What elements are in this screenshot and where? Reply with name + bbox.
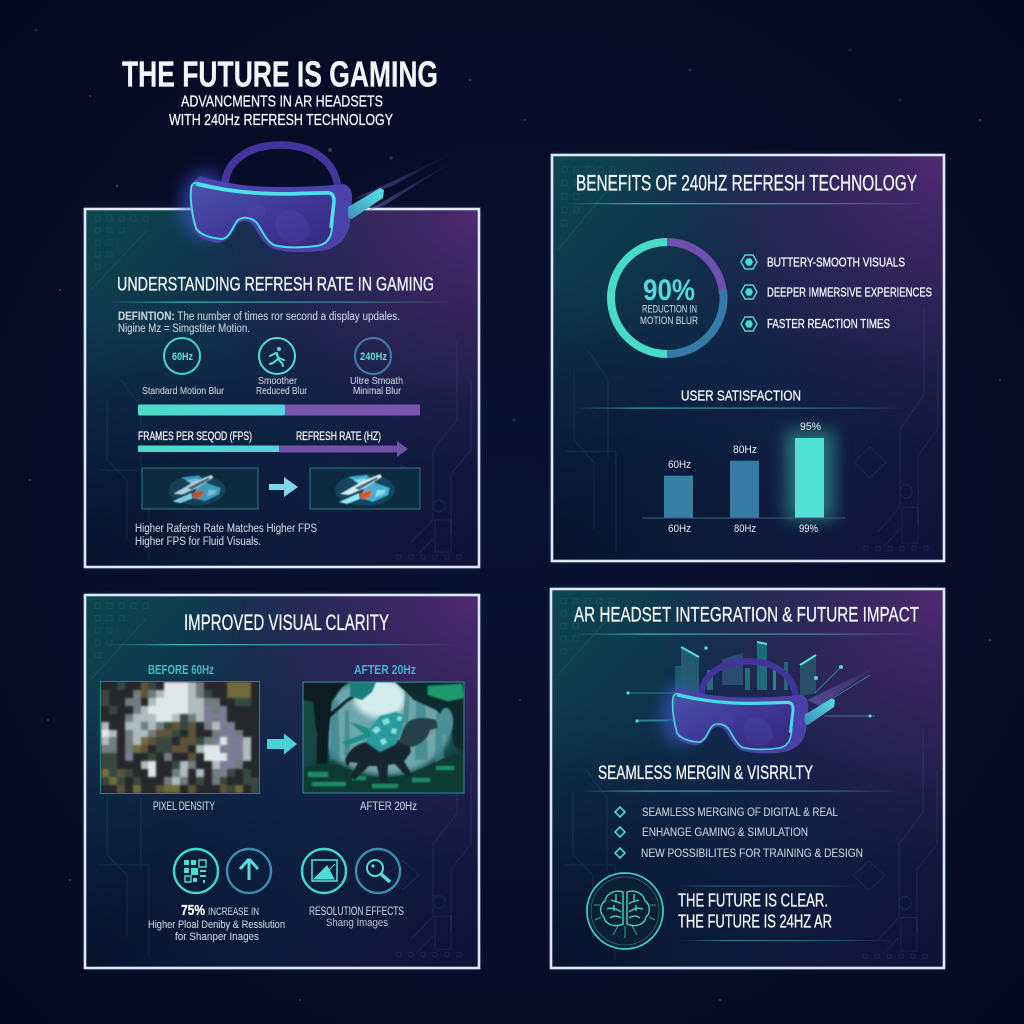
streaks behind headset: [352, 152, 455, 212]
bar chart: [642, 421, 845, 535]
arrow: [267, 734, 297, 754]
benefit list: FASTER REACTION TIMES: [767, 317, 890, 331]
closing statement: THE FUTURE IS 24HZ AR: [678, 912, 832, 932]
heading: UNDERSTANDING REFRESH RATE IN GAMING: [117, 274, 434, 296]
icon: pixel grid: [174, 849, 218, 893]
arrow: [269, 477, 298, 497]
panel: understanding refresh rate: [85, 209, 479, 567]
donut chart: 90%: 90%: [643, 274, 695, 307]
bar chart: 95%: [800, 421, 821, 433]
labels under gauges: [142, 375, 403, 397]
bar chart: 99%: [799, 523, 818, 535]
subheading: USER SATISFACTION: [681, 389, 801, 405]
image: sharp forest creature: [303, 675, 464, 793]
icon: brain: [587, 873, 663, 949]
subtitle line 2: WITH 240Hz REFRESH TECHNOLOGY: [169, 112, 393, 129]
caption: Higher Rafersh Rate Matches Higher FPS: [135, 523, 317, 535]
label: after: AFTER 20Hz: [354, 662, 416, 677]
bullet 2: [741, 285, 757, 299]
FPS and refresh rate labels: FRAMES PER SEQOD (FPS): [138, 429, 252, 443]
stat: 75% increase: INCREASE IN: [208, 906, 259, 918]
stat: 75% increase: [148, 902, 285, 943]
bar chart: 80Hz: [733, 444, 757, 456]
arrow: FPS to Hz: [138, 441, 408, 457]
stat: 75% increase: 75%: [181, 902, 205, 919]
caption: Higher FPS for Fluid Visuals.: [135, 536, 261, 548]
stat: resolution effects: RESOLUTION EFFECTS: [309, 906, 404, 918]
icon: 60Hz gauge: [164, 338, 200, 374]
stat: resolution effects: Shang Images: [326, 917, 388, 929]
captions under images: [153, 801, 417, 813]
icon: 240Hz gauge: 240Hz: [360, 351, 387, 363]
main heading: THE FUTURE IS GAMING: [122, 54, 438, 94]
bullet list: ENHANGE GAMING & SIMULATION: [642, 827, 808, 839]
bullet list: NEW POSSIBILITES FOR TRAINING & DESIGN: [641, 848, 863, 860]
icon: magnifier: [356, 849, 400, 893]
stat: 75% increase: for Shanper Inages: [175, 931, 259, 943]
definition text: [118, 311, 400, 335]
subtitle line 1: ADVANCMENTS IN AR HEADSETS: [181, 94, 383, 110]
bar chart: 80Hz: [734, 523, 756, 535]
stat: 75% increase: Higher Ploal Deniby & Resslution: [148, 919, 285, 931]
labels under gauges: Standard Motion Blur: [142, 385, 224, 397]
FPS and refresh rate labels: REFRESH RATE (HZ): [296, 429, 381, 443]
frame: ship before: [142, 468, 258, 509]
closing statement: [678, 891, 832, 932]
FPS and refresh rate labels: [138, 429, 381, 443]
frame: ship after: [310, 468, 420, 509]
labels under gauges: Smoother: [258, 375, 297, 387]
labels under gauges: Reduced Blur: [256, 385, 307, 397]
bar chart: 60Hz: [668, 459, 691, 471]
icon: 240Hz gauge: [355, 338, 391, 374]
heading: IMPROVED VISUAL CLARITY: [184, 610, 389, 635]
panel: improved visual clarity: [85, 595, 479, 968]
illustration: city and headset: [626, 642, 880, 753]
icon: 60Hz gauge: 60Hz: [172, 351, 193, 363]
bar chart: 60Hz: [668, 523, 691, 535]
definition text: DEFINTION: The number of times ror second a display updales.: [118, 311, 400, 323]
benefit list: BUTTERY-SMOOTH VISUALS: [767, 256, 905, 270]
labels under gauges: Ultre Smoath: [350, 375, 403, 387]
bullet list: [615, 807, 863, 860]
bullet list: SEAMLESS MERGING OF DIGITAL & REAL: [642, 807, 839, 819]
captions under images: AFTER 20Hz: [360, 801, 417, 813]
donut chart: 90%: REDUCTION IN: [642, 304, 697, 316]
closing statement: THE FUTURE IS CLEAR.: [678, 891, 828, 911]
image: pixelated forest: [100, 682, 260, 794]
icon: top headset: [181, 145, 384, 252]
stat: resolution effects: [309, 906, 404, 929]
title: [122, 54, 438, 129]
panel: benefits: [552, 155, 944, 561]
subheading: SEAMLESS MERGIN & VISRRLTY: [598, 763, 813, 784]
progress bar: [138, 404, 420, 416]
icon: picture: [302, 849, 346, 893]
captions under images: PIXEL DENSITY: [153, 801, 215, 813]
benefit list: [741, 255, 932, 331]
definition text: Nigine Mz = Simgstiter Motion.: [118, 323, 250, 335]
benefit list: DEEPER IMMERSIVE EXPERIENCES: [767, 286, 932, 300]
labels under gauges: Minimal Blur: [353, 385, 401, 397]
bullet 1: [741, 255, 757, 269]
icon: running figure: [259, 338, 295, 374]
bullet 3: [741, 317, 757, 331]
donut chart: 90%: [611, 242, 724, 354]
label: before: BEFORE 60Hz: [148, 662, 214, 677]
icon: up arrow: [227, 849, 271, 893]
caption: [135, 523, 317, 548]
donut chart: 90%: MOTION BLUR: [640, 315, 698, 327]
panel: AR headset integration: [551, 589, 944, 968]
